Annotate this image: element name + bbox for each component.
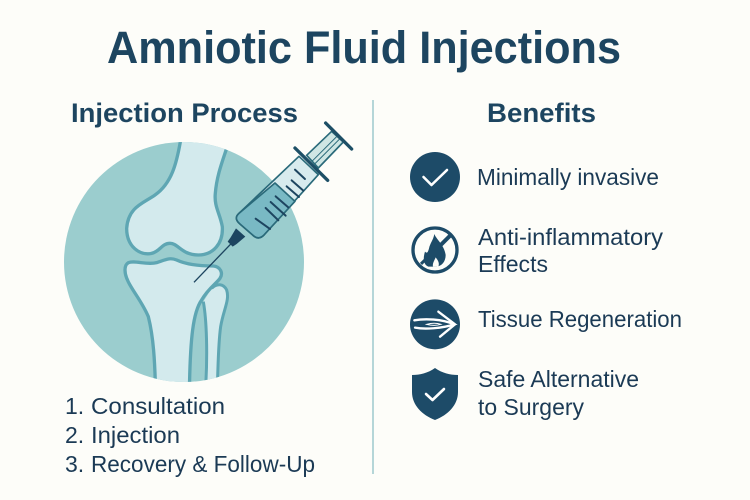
heading: benefits: Benefits <box>487 98 596 128</box>
needle <box>194 241 234 282</box>
icon: check circle <box>410 152 460 202</box>
benefit: safe alternative <box>412 366 639 420</box>
step 2: 2. <box>65 422 84 448</box>
step 2: Injection <box>91 422 180 448</box>
plunger <box>307 131 343 168</box>
label: Safe Alternative <box>478 366 639 392</box>
label line 2: to Surgery <box>478 394 584 420</box>
fibula <box>204 286 226 380</box>
label: Tissue Regeneration <box>478 306 682 332</box>
femur <box>128 142 225 254</box>
icon: crossed flame <box>413 228 457 272</box>
step 1: 1. <box>65 393 84 419</box>
icon: shield check <box>412 368 458 420</box>
label: Anti-inflammatory <box>478 224 664 250</box>
barrel <box>236 156 318 238</box>
liquid <box>236 183 295 238</box>
knee bones <box>125 133 228 397</box>
syringe <box>194 123 352 282</box>
infographic <box>64 30 681 477</box>
flanges <box>295 123 352 180</box>
step 3: 3. <box>65 451 84 477</box>
benefit: tissue regeneration <box>410 299 682 349</box>
tibia <box>125 259 221 397</box>
label line 2: Effects <box>478 251 548 277</box>
step 3: Recovery & Follow-Up <box>91 451 315 477</box>
knee illustration <box>64 123 352 397</box>
benefit: minimally invasive <box>410 152 659 202</box>
step 1: Consultation <box>91 393 225 419</box>
teal circle background <box>64 142 304 382</box>
needle hub <box>228 228 245 247</box>
label: Minimally invasive <box>477 164 659 190</box>
title: Amniotic Fluid Injections <box>107 22 621 73</box>
icon: tissue arrow <box>410 299 460 349</box>
benefit: anti-inflammatory <box>413 224 664 277</box>
steps list <box>65 393 315 477</box>
heading: injection process: Injection Process <box>71 98 298 128</box>
scale ticks <box>256 170 305 229</box>
